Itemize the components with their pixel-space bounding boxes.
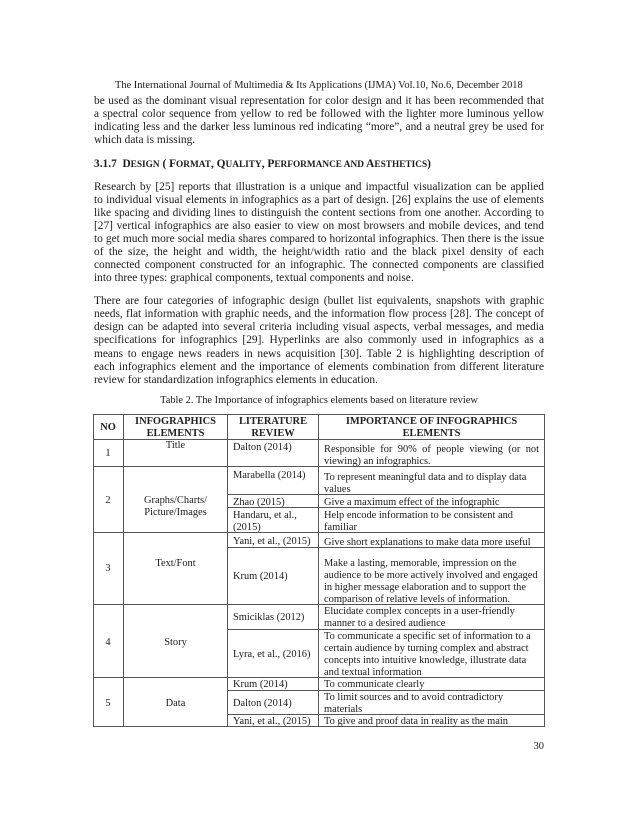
- row 2: graphs, charts, pictures, images: Give a maximum effect of the infographic: [324, 497, 500, 508]
- row 2: graphs, charts, pictures, images: familiar: [324, 522, 357, 533]
- section heading: 3.1.7 DESIGN ( FORMAT, QUALITY, PERFORMANCE AND AESTHETICS): [94, 158, 431, 170]
- row 2: graphs, charts, pictures, images: Picture/Images: [144, 507, 207, 518]
- row 2: graphs, charts, pictures, images: Graphs/Charts/: [144, 495, 207, 506]
- table header row: NO: [100, 422, 116, 433]
- paragraph: categories: design can be adapted into several criteria including visual aspects, verbal messages, and media: [94, 320, 544, 332]
- paragraph: color design: indicating less and the darker less luminous red indicating “more”, and a neutral grey be used for: [94, 120, 544, 132]
- row 2: graphs, charts, pictures, images: Help encode information to be consistent and: [324, 510, 513, 521]
- row 3: text and font: Give short explanations to make data more useful: [324, 537, 531, 548]
- row 1: title: Responsible for 90% of people viewing (or not: [324, 444, 539, 455]
- table grid: [93, 414, 545, 727]
- row 3: text and font: Krum (2014): [233, 571, 288, 582]
- row 3: text and font: 3: [105, 563, 111, 574]
- paragraph: categories: [94, 294, 544, 386]
- row 5: data: Yani, et al., (2015): [233, 716, 311, 727]
- row 2: graphs, charts, pictures, images: Handaru, et al.,: [233, 510, 297, 521]
- row 4: story: and textual information: [324, 667, 422, 678]
- paragraph: research: to individual visual elements in infographics as a part of design. [26] explains the use of elements: [94, 194, 544, 206]
- table caption: Table 2. The Importance of infographics elements based on literature review: [160, 395, 478, 406]
- row 3: text and font: comparison of relative levels of information.: [324, 594, 510, 605]
- row 2: graphs, charts, pictures, images: values: [324, 484, 351, 495]
- row 2: graphs, charts, pictures, images: To represent meaningful data and to display data: [324, 472, 526, 483]
- paragraph: research: of the size, the height and width, the height/width ratio and the black pixel density of each: [94, 246, 544, 258]
- paragraph: color design: which data is missing.: [94, 134, 195, 146]
- paragraph: research: Research by [25] reports that illustration is a unique and impactful visualization can be applied: [94, 180, 544, 192]
- row 5: data: To communicate clearly: [324, 679, 424, 690]
- row 3: text and font: audience to be more actively involved and engaged: [324, 570, 538, 581]
- row 1: title: Title: [166, 440, 185, 451]
- paragraph: categories: needs, flat information with graphic needs, and the information flow process [28]. The concept of: [94, 308, 544, 320]
- running header: The International Journal of Multimedia & Its Applications (IJMA) Vol.10, No.6, December 2018: [115, 80, 523, 90]
- row 5: data: To give and proof data in reality as the main: [324, 716, 508, 727]
- paragraph: categories: each infographics element and the importance of elements combination from different literature: [94, 360, 544, 372]
- row 2: graphs, charts, pictures, images: Zhao (2015): [233, 497, 285, 508]
- row 5: data: To limit sources and to avoid contradictory: [324, 692, 503, 703]
- row 4: story: concepts into intuitive knowledge, illustrate data: [324, 655, 526, 666]
- table header row: IMPORTANCE OF INFOGRAPHICS: [346, 416, 517, 427]
- table header row: LITERATURE: [239, 416, 307, 427]
- row 5: data: Data: [166, 698, 185, 709]
- paragraph: research: like spacing and dividing lines to distinguish the content sections from one another. According to: [94, 206, 544, 218]
- page number: 30: [534, 740, 544, 752]
- row 4: story: Elucidate complex concepts in a user-friendly: [324, 606, 515, 617]
- table header row: ELEMENTS: [403, 428, 460, 439]
- row 5: data: Dalton (2014): [233, 698, 292, 709]
- row 4: story: Smiciklas (2012): [233, 612, 304, 623]
- row 2: graphs, charts, pictures, images: [105, 470, 526, 533]
- table header row: ELEMENTS: [147, 428, 204, 439]
- paragraph: color design: be used as the dominant visual representation for color design and it has been recommended that: [94, 94, 544, 106]
- row 3: text and font: in higher message elaboration and to support the: [324, 582, 526, 593]
- row 4: story: [105, 606, 531, 678]
- paragraph: categories: means to engage news readers in news acquisition [30]. Table 2 is highlighting description of: [94, 348, 544, 360]
- paragraph: research: into three types: graphical components, textual components and noise.: [94, 272, 414, 284]
- row 2: graphs, charts, pictures, images: 2: [105, 495, 111, 506]
- row 3: text and font: Text/Font: [155, 558, 196, 569]
- row 2: graphs, charts, pictures, images: (2015): [233, 522, 261, 533]
- paragraph: research: to get much more social media shares compared to horizontal infographics. Then there is the issue: [94, 232, 544, 244]
- row 1: title: viewing) an infographics.: [324, 456, 431, 467]
- row 5: data: 5: [105, 698, 111, 709]
- row 4: story: certain audience by turning complex and abstract: [324, 643, 529, 654]
- paragraph: research: [94, 180, 544, 284]
- row 4: story: manner to a desired audience: [324, 618, 445, 629]
- row 4: story: Lyra, et al., (2016): [233, 649, 310, 660]
- paragraph: research: [27] vertical infographics are also easier to view on most browsers and mobile devices, and tend: [94, 220, 544, 232]
- row 5: data: materials: [324, 704, 362, 715]
- row 2: graphs, charts, pictures, images: Marabella (2014): [233, 470, 306, 481]
- row 3: text and font: [105, 536, 538, 605]
- paragraph: categories: review for standardization infographics elements in education.: [94, 374, 378, 386]
- paragraph: categories: There are four categories of infographic design (bullet list equivalents, snapshots with graphic: [94, 294, 544, 306]
- table header row: REVIEW: [251, 428, 295, 439]
- row 3: text and font: Make a lasting, memorable, impression on the: [324, 558, 516, 569]
- row 4: story: 4: [105, 637, 111, 648]
- row 4: story: To communicate a specific set of information to a: [324, 631, 531, 642]
- table header row: INFOGRAPHICS: [135, 416, 216, 427]
- row 4: story: Story: [164, 637, 187, 648]
- row 1: title: [105, 440, 539, 467]
- row 3: text and font: Yani, et al., (2015): [233, 536, 311, 547]
- row 1: title: 1: [105, 448, 111, 459]
- table header row: [100, 416, 517, 439]
- row 5: data: [105, 679, 508, 727]
- paragraph: color design: [94, 94, 544, 146]
- paragraph: research: connected component constructed for an infographic. The connected components are classified: [94, 258, 544, 270]
- paragraph: color design: a spectral color sequence from yellow to red be followed with the lighter more luminous yellow: [94, 108, 544, 120]
- row 1: title: Dalton (2014): [233, 442, 292, 453]
- row 5: data: Krum (2014): [233, 679, 288, 690]
- table: importance of infographics elements: [93, 414, 545, 727]
- paragraph: categories: specifications for infographics [29]. Hyperlinks are also commonly used in infographics as a: [94, 334, 544, 346]
